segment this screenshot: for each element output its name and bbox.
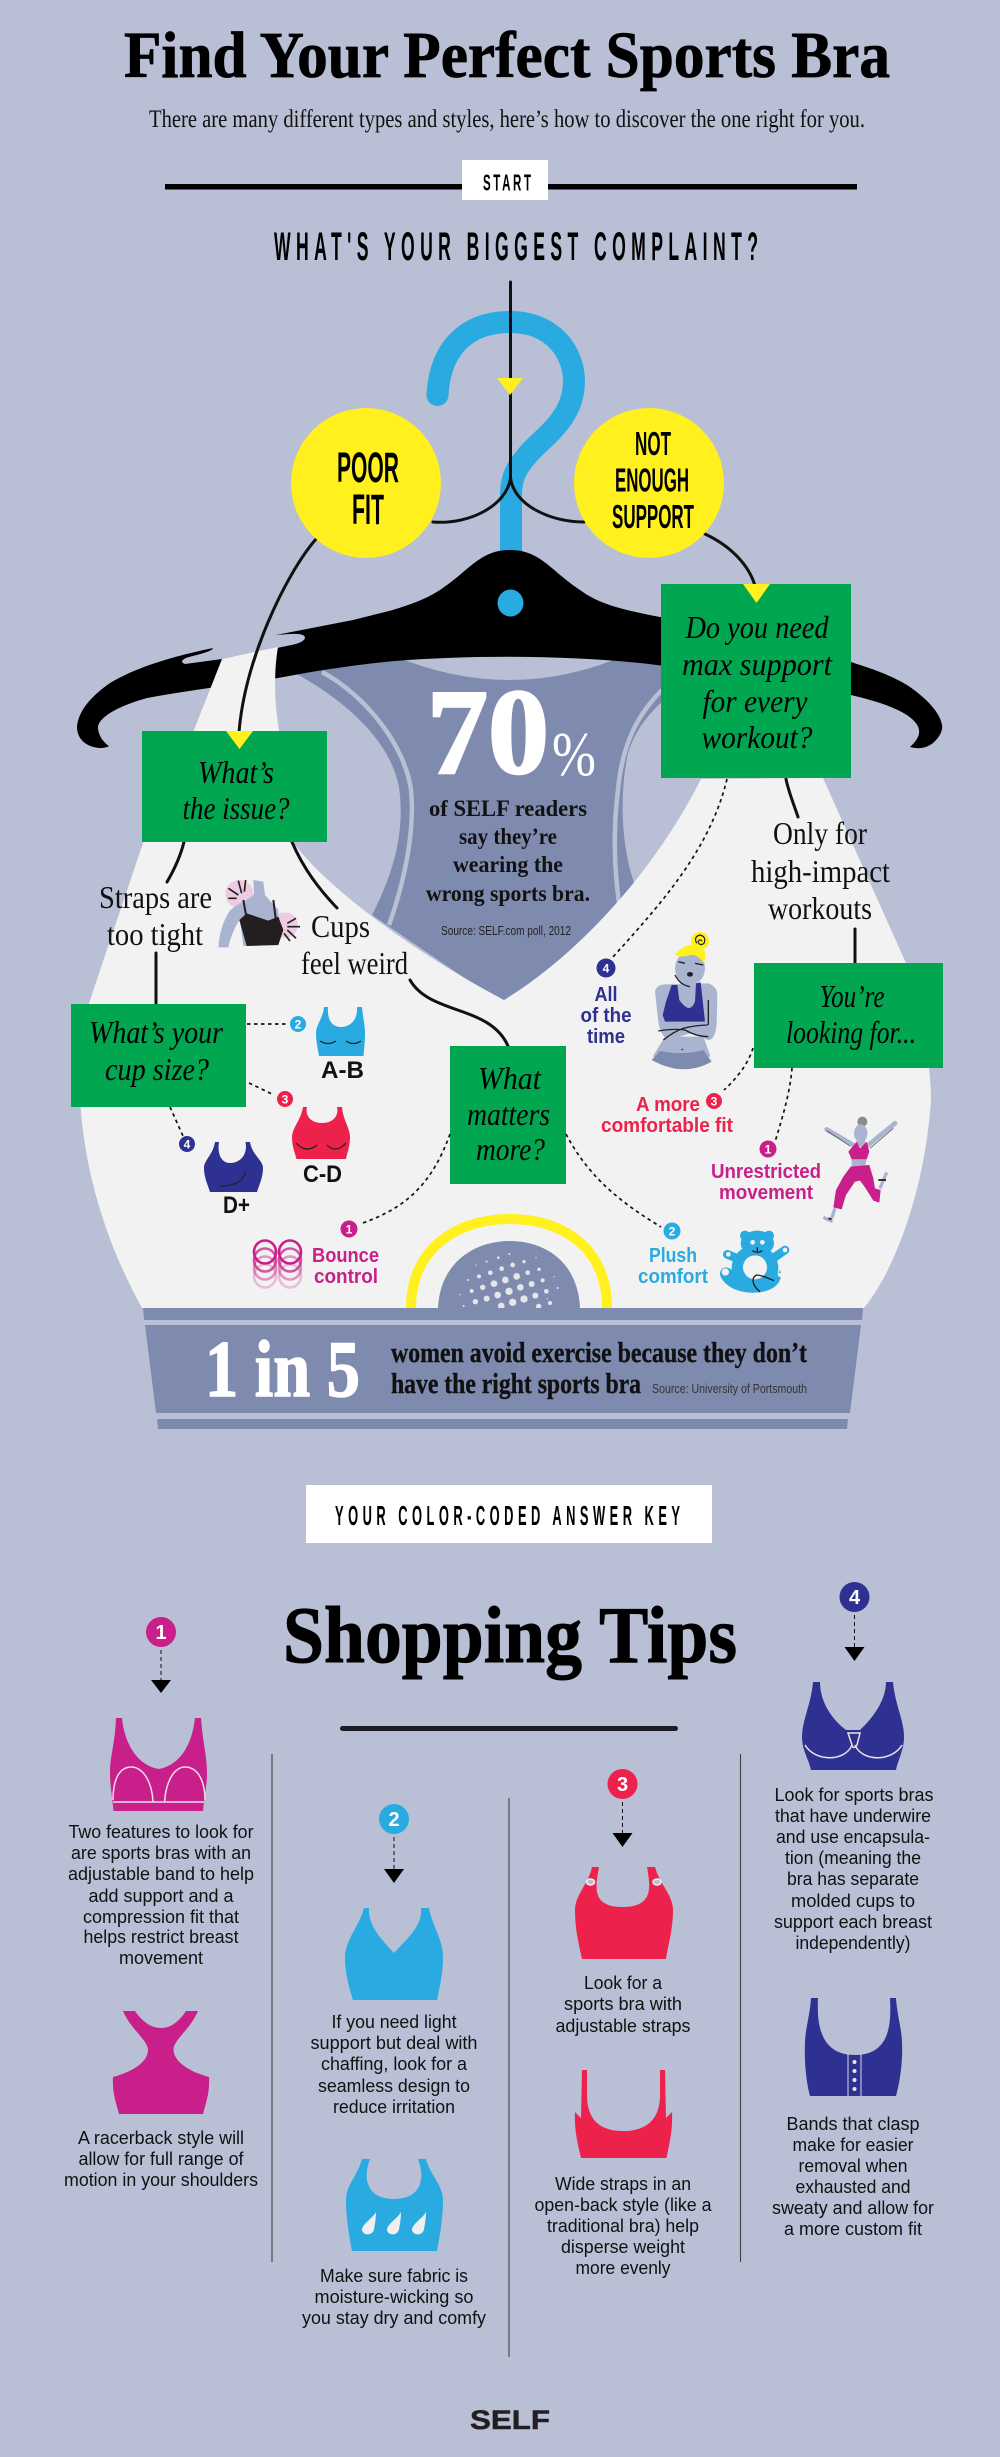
- tip column 2: If you need light: [332, 2012, 456, 2032]
- tip column 2: Make sure fabric is: [320, 2266, 468, 2286]
- question box: what matters more: more?: [476, 1131, 545, 1167]
- label: straps are too tight: Straps are: [99, 879, 212, 915]
- panel: white bra body: [80, 647, 931, 1308]
- question box: max support: [661, 584, 851, 778]
- answer: not enough support: SUPPORT: [612, 498, 694, 535]
- question box: the issue: [142, 731, 327, 842]
- tip column 1: are sports bras with an: [71, 1843, 251, 1863]
- illustration: dome with dots and yellow arc: [411, 1219, 607, 1309]
- option: bounce control: 1: [346, 1222, 353, 1236]
- tip column 4: [772, 1582, 934, 2239]
- tip column 2: you stay dry and comfy: [302, 2308, 486, 2328]
- panel: bra band stat, 1 in 5: Source: University of Portsmouth: [652, 1381, 807, 1396]
- option: bounce control: control: [314, 1266, 378, 1288]
- tip column 4: exhausted and: [796, 2177, 910, 2197]
- title: Find Your Perfect Sports Bra: [124, 19, 890, 92]
- tip column 2: [302, 1804, 486, 2328]
- option: a more comfortable fit: 3: [711, 1094, 718, 1108]
- stat: 70 percent: say they’re: [459, 824, 557, 849]
- label: cups feel weird: Cups: [311, 908, 370, 944]
- option: bounce control: Bounce: [312, 1245, 379, 1267]
- option: unrestricted movement: movement: [719, 1182, 813, 1204]
- option: cup A-B: [290, 1007, 365, 1084]
- answer: poor fit: [291, 408, 441, 558]
- panel: bra band stat, 1 in 5: 1 in 5: [205, 1326, 360, 1414]
- tip column 3: open-back style (like a: [534, 2195, 712, 2215]
- tip column 2: seamless design to: [318, 2076, 470, 2096]
- tip column 1: A racerback style will: [78, 2128, 244, 2148]
- tip column 4: independently): [796, 1933, 910, 1953]
- tip column 3: Look for a: [584, 1973, 663, 1993]
- tip column 1: movement: [119, 1948, 203, 1968]
- option: cup A-B: A-B: [321, 1057, 364, 1084]
- question box: what matters more: matters: [467, 1096, 550, 1132]
- question box: the issue: What’s: [198, 754, 274, 790]
- option: cup D+: 4: [184, 1138, 191, 1152]
- question box: what matters more: [450, 1046, 566, 1184]
- stat: 70 percent: %: [552, 721, 596, 789]
- connector lines: [156, 282, 855, 1046]
- option: unrestricted movement: Unrestricted: [711, 1161, 821, 1183]
- tip column 4: Bands that clasp: [786, 2114, 920, 2134]
- stat: 70 percent: Source: SELF.com poll, 2012: [441, 923, 571, 938]
- option: a more comfortable fit: A more: [636, 1094, 700, 1116]
- tip column 3: Wide straps in an: [555, 2174, 691, 2194]
- option: plush comfort: comfort: [638, 1266, 708, 1288]
- question box: looking for: You’re: [820, 978, 884, 1014]
- stat: 70 percent: 70: [427, 665, 549, 800]
- dashed connectors: [170, 779, 792, 1227]
- option: cup A-B: 2: [295, 1018, 302, 1032]
- tip column 4: that have underwire: [775, 1806, 931, 1826]
- tip column 4: support each breast: [774, 1912, 932, 1932]
- label: straps are too tight: [99, 879, 212, 952]
- tip column 1: [64, 1617, 258, 2190]
- label: only for high-impact workouts: high-impact: [751, 853, 890, 889]
- tip column 4: make for easier: [792, 2135, 914, 2155]
- option: all of the time: All: [594, 984, 618, 1006]
- label: cups feel weird: feel weird: [301, 945, 408, 981]
- answer: not enough support: [574, 408, 724, 558]
- panel: bra band stat, 1 in 5: [143, 1308, 863, 1429]
- stat: 70 percent: [426, 665, 596, 938]
- tip column 3: adjustable straps: [556, 2016, 690, 2036]
- option: all of the time: time: [587, 1026, 625, 1048]
- label: only for high-impact workouts: Only for: [773, 815, 867, 851]
- tip column 1: helps restrict breast: [84, 1927, 238, 1947]
- question box: looking for: looking for...: [786, 1014, 916, 1050]
- tip column 2: 2: [388, 1809, 400, 1831]
- icon: runner: [823, 1117, 895, 1222]
- question box: max support: for every: [702, 683, 808, 719]
- tip column 4: and use encapsula-: [776, 1827, 930, 1847]
- tip column 3: traditional bra) help: [547, 2216, 699, 2236]
- option: plush comfort: Plush: [649, 1245, 697, 1267]
- tip column 4: bra has separate: [787, 1869, 919, 1889]
- answer: not enough support: NOT: [635, 425, 671, 462]
- hanger: [77, 322, 942, 748]
- answer: poor fit: POOR: [337, 444, 399, 492]
- tip column 3: 3: [617, 1774, 628, 1796]
- panel: central dark bra back: [293, 650, 664, 1005]
- tip column 4: 4: [849, 1587, 861, 1609]
- tip column 4: Look for sports bras: [774, 1785, 934, 1805]
- tip column 1: adjustable band to help: [68, 1864, 254, 1884]
- tip column 2: moisture-wicking so: [314, 2287, 474, 2307]
- question box: cup size: cup size?: [105, 1051, 209, 1087]
- option: all of the time: 4: [603, 962, 610, 976]
- option: a more comfortable fit: [601, 1093, 733, 1137]
- shopping tips heading: Shopping Tips: [283, 1592, 737, 1680]
- stat: 70 percent: wearing the: [453, 852, 563, 877]
- option: all of the time: of the: [580, 1005, 632, 1027]
- tip column 1: Two features to look for: [68, 1822, 254, 1842]
- option: cup D+: [179, 1136, 263, 1219]
- tip column 2: chaffing, look for a: [321, 2054, 468, 2074]
- start marker: [165, 160, 857, 200]
- tip column 4: molded cups to: [791, 1891, 915, 1911]
- question box: what matters more: What: [478, 1060, 542, 1096]
- tip column 1: motion in your shoulders: [64, 2170, 258, 2190]
- start marker: START: [483, 170, 531, 196]
- tip column 1: 1: [155, 1622, 167, 1644]
- option: unrestricted movement: [711, 1140, 821, 1204]
- option: plush comfort: 2: [669, 1224, 676, 1238]
- tip column 1: allow for full range of: [78, 2149, 244, 2169]
- question heading: WHAT'S YOUR BIGGEST COMPLAINT?: [274, 224, 758, 269]
- tip column 4: a more custom fit: [784, 2219, 922, 2239]
- option: cup C-D: [277, 1091, 350, 1188]
- stat: 70 percent: of SELF readers: [429, 796, 587, 821]
- label: cups feel weird: [301, 908, 408, 981]
- question box: cup size: [71, 1004, 246, 1107]
- label: only for high-impact workouts: workouts: [768, 890, 872, 926]
- label: straps are too tight: too tight: [107, 916, 203, 952]
- shopping tips heading: [283, 1592, 737, 1731]
- subtitle: There are many different types and styles, here’s how to discover the one right for you.: [149, 106, 865, 133]
- option: bounce control: [254, 1220, 379, 1288]
- answer key heading: [306, 1485, 712, 1543]
- column dividers: [272, 1754, 740, 2357]
- icon: pain points on straps and bra: [218, 880, 300, 947]
- tip column 1: add support and a: [88, 1886, 234, 1906]
- answer: not enough support: ENOUGH: [615, 462, 689, 498]
- label: only for high-impact workouts: [751, 815, 890, 926]
- option: unrestricted movement: 1: [765, 1142, 772, 1156]
- option: cup C-D: 3: [282, 1092, 289, 1106]
- option: plush comfort: [638, 1222, 708, 1288]
- logo: SELF: SELF: [470, 2405, 550, 2435]
- tip column 2: support but deal with: [310, 2033, 478, 2053]
- option: a more comfortable fit: comfortable fit: [601, 1115, 733, 1137]
- panel: bra band stat, 1 in 5: have the right sports bra: [391, 1368, 641, 1400]
- tip column 3: more evenly: [576, 2258, 670, 2278]
- question box: looking for: [754, 963, 943, 1068]
- tip column 1: compression fit that: [83, 1907, 239, 1927]
- question box: cup size: What’s your: [89, 1014, 223, 1050]
- icon: woman with crossed arms: [652, 932, 717, 1069]
- answer: poor fit: FIT: [352, 486, 384, 534]
- tip column 3: [534, 1769, 712, 2278]
- tip column 3: sports bra with: [564, 1994, 682, 2014]
- icon: teddy bear: [720, 1231, 787, 1293]
- option: cup D+: D+: [223, 1192, 250, 1219]
- tip column 4: tion (meaning the: [785, 1848, 921, 1868]
- question box: the issue: the issue?: [182, 790, 290, 826]
- tip column 2: reduce irritation: [333, 2097, 455, 2117]
- stat: 70 percent: wrong sports bra.: [426, 881, 590, 906]
- tip column 3: disperse weight: [561, 2237, 685, 2257]
- option: all of the time: [580, 958, 632, 1048]
- tip column 4: sweaty and allow for: [772, 2198, 934, 2218]
- question box: max support: workout?: [702, 719, 812, 755]
- question box: max support: max support: [682, 646, 833, 682]
- tip column 4: removal when: [798, 2156, 908, 2176]
- answer key heading: YOUR COLOR-CODED ANSWER KEY: [335, 1499, 680, 1531]
- panel: bra band stat, 1 in 5: women avoid exercise because they don’t: [391, 1337, 807, 1369]
- question box: max support: Do you need: [685, 609, 829, 645]
- option: cup C-D: C-D: [303, 1161, 342, 1188]
